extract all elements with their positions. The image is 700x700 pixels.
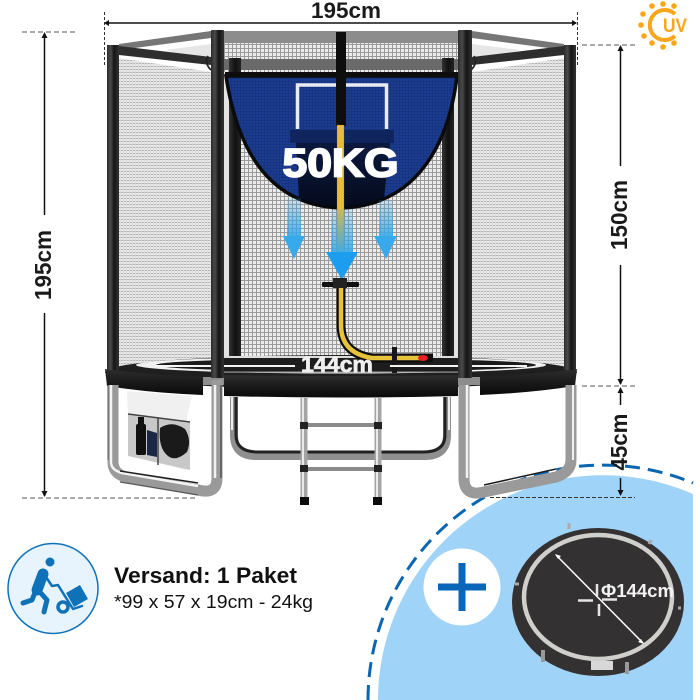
rear poles	[229, 58, 454, 358]
round mat accessory	[512, 523, 684, 676]
safety net panels	[119, 31, 564, 366]
dimension: height 195cm: 195cm	[30, 230, 56, 300]
basketball net with hoop backboard	[225, 32, 458, 255]
right front leg	[464, 385, 573, 493]
shipping text: *99 x 57 x 19cm - 24kg	[114, 591, 313, 612]
dimension: enclosure 150cm	[582, 45, 636, 386]
top frame rails	[119, 31, 564, 70]
mat diameter arrow	[555, 554, 644, 644]
ladder	[300, 398, 382, 505]
padded frame ring	[105, 369, 577, 398]
dimension: leg 45cm	[490, 387, 635, 498]
panel: accessory background circle	[368, 465, 693, 700]
dimension: leg 45cm: 45cm	[606, 414, 632, 470]
rear U leg	[232, 397, 449, 456]
front poles	[107, 30, 576, 378]
icon: person with hand truck	[8, 544, 98, 634]
zipper	[322, 278, 433, 373]
dimension: height 195cm	[22, 32, 198, 498]
dimension: enclosure 150cm: 150cm	[606, 180, 632, 250]
accessory bag	[127, 391, 192, 470]
shipping text: Versand: 1 Paket	[114, 563, 298, 588]
icon: UV protection sun: UV	[663, 16, 687, 37]
left front leg	[108, 380, 221, 495]
shipping text	[114, 563, 313, 612]
icon: plus badge	[424, 548, 500, 626]
trampoline illustration	[105, 30, 577, 505]
load label: 50KG	[282, 142, 398, 186]
mat diameter label: Φ144cm	[601, 581, 674, 601]
dimension: width 195cm	[104, 0, 578, 66]
jumping mat	[105, 355, 577, 389]
icon: UV protection sun	[638, 1, 687, 50]
load arrows	[283, 198, 397, 280]
mat diameter dimension: 144cm	[301, 352, 373, 377]
